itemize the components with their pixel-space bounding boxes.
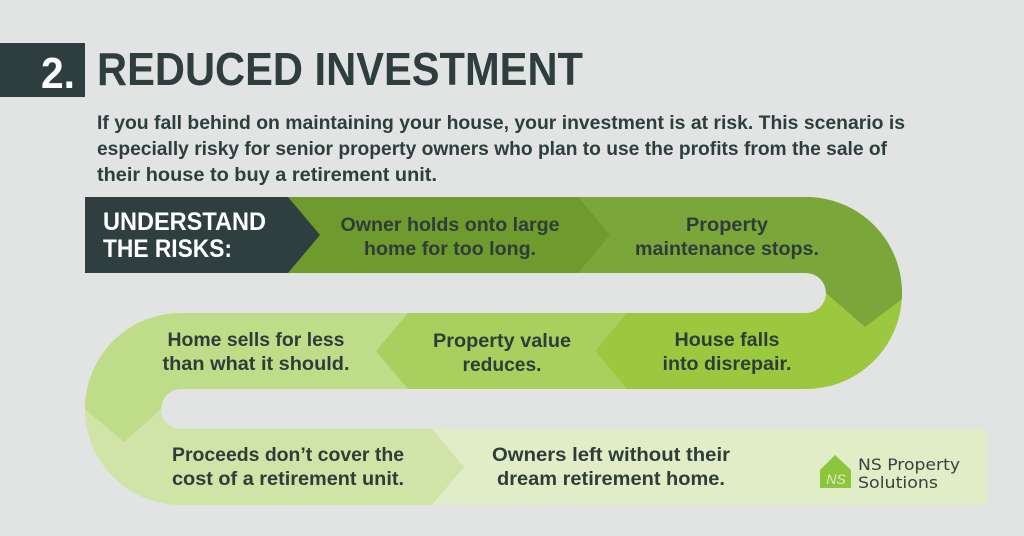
label: understand the risks: THE RISKS: — [103, 235, 232, 263]
logo: Solutions — [858, 473, 938, 492]
step 5 — [162, 330, 350, 375]
row 2 middle segment — [376, 313, 640, 389]
step 4 — [433, 331, 571, 376]
logo: NS Property — [858, 455, 960, 474]
step texts — [162, 215, 819, 490]
step 5: Home sells for less — [168, 330, 344, 351]
row 1 segment 1 — [280, 197, 610, 273]
step 4: reduces. — [462, 355, 542, 376]
step 4: Property value — [433, 331, 571, 352]
title: REDUCED INVESTMENT — [97, 43, 583, 95]
step 3 — [662, 330, 792, 375]
step 7: dream retirement home. — [497, 469, 725, 490]
title number box — [0, 43, 85, 98]
icon: house: NS — [826, 471, 846, 487]
step 7 — [492, 445, 731, 490]
row 2 right segment — [595, 313, 806, 389]
step 6: Proceeds don’t cover the — [172, 445, 404, 466]
right curve — [806, 197, 902, 389]
left curve — [85, 313, 181, 505]
step 6 — [172, 445, 404, 490]
label: understand the risks — [103, 208, 266, 263]
intro paragraph: If you fall behind on maintaining your house, your investment is at risk. This scenario is — [97, 113, 905, 134]
step 2: Property — [686, 215, 768, 236]
step 6: cost of a retirement unit. — [172, 469, 404, 490]
step 3: into disrepair. — [662, 354, 792, 375]
step 1: Owner holds onto large — [340, 215, 560, 236]
step 2: maintenance stops. — [635, 239, 819, 260]
label: understand the risks: UNDERSTAND — [103, 208, 266, 236]
step 1: home for too long. — [364, 239, 536, 260]
step 2 — [635, 215, 819, 260]
dark label box — [85, 197, 320, 273]
step 3: House falls — [674, 330, 780, 351]
title number box: 2. — [41, 49, 75, 98]
step 5: than what it should. — [162, 354, 350, 375]
row 3 segment 1 — [181, 429, 464, 505]
intro paragraph: especially risky for senior property owners who plan to use the profits from the sale of — [97, 139, 888, 160]
step 1 — [340, 215, 560, 260]
intro paragraph — [97, 113, 905, 186]
flow path: snake of risk steps — [80, 190, 987, 515]
row 1 segment 2 — [560, 197, 806, 273]
row 2 left segment — [181, 313, 411, 389]
logo — [820, 455, 960, 492]
row 3 segment 2 — [181, 429, 987, 505]
step 7: Owners left without their — [492, 445, 731, 466]
intro paragraph: their house to buy a retirement unit. — [97, 165, 437, 186]
